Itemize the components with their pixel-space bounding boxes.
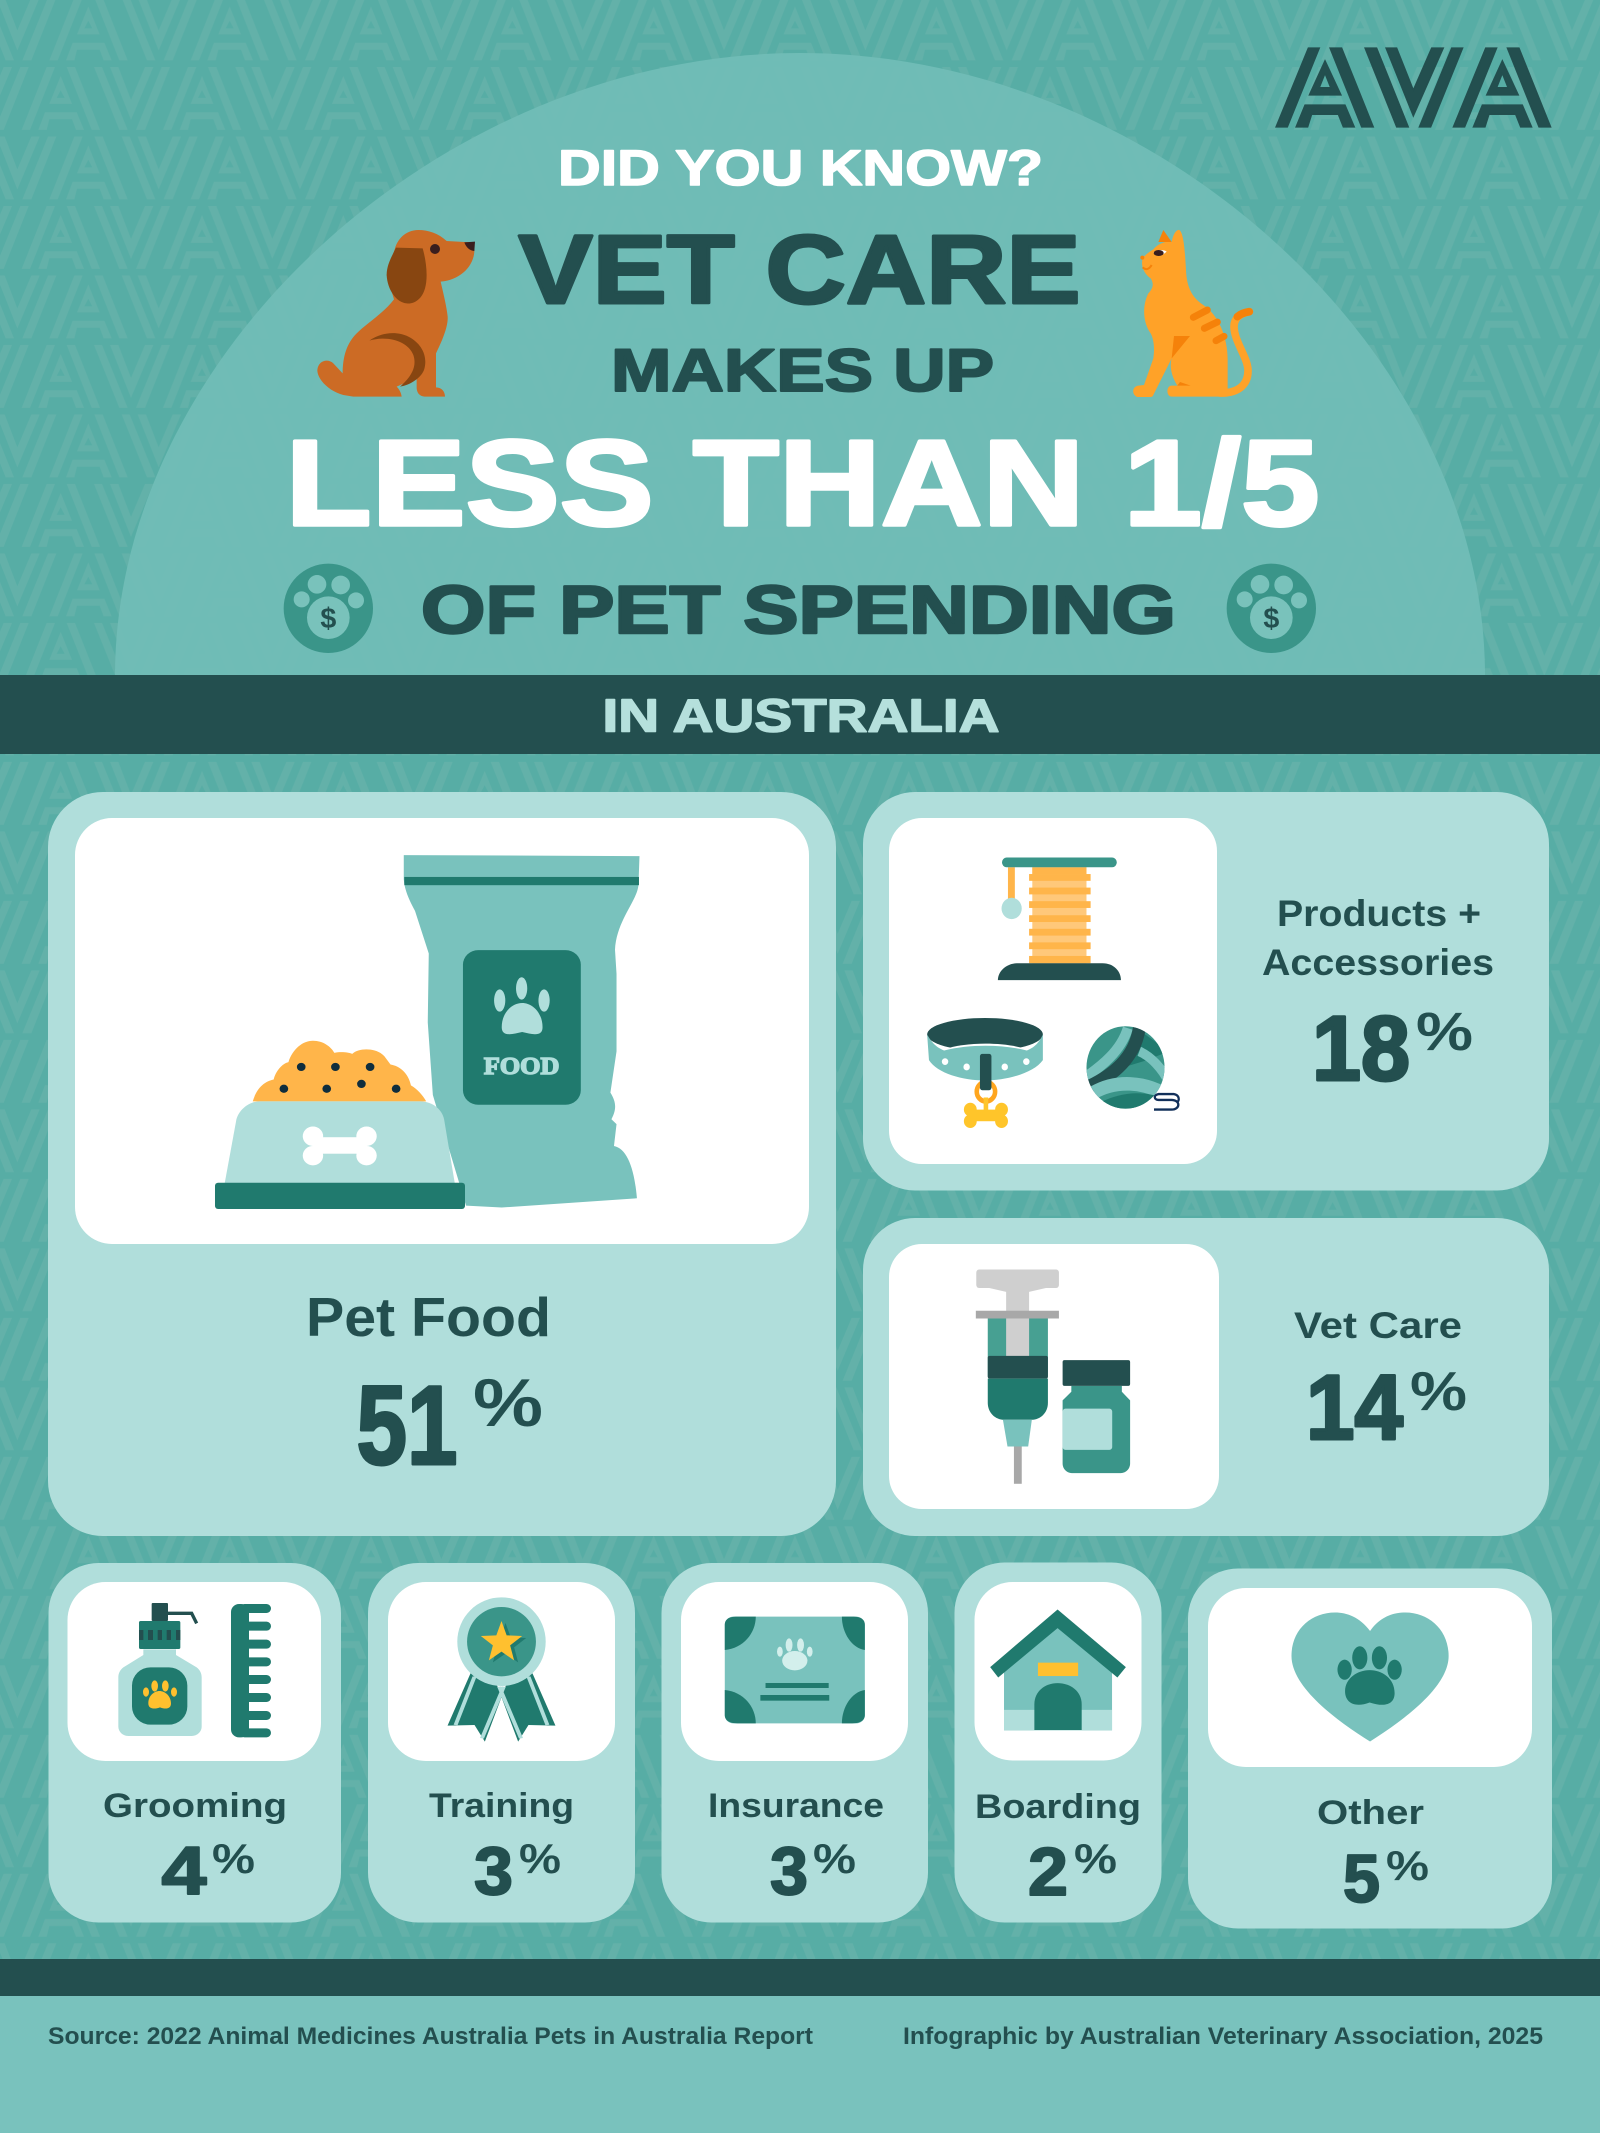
value: 5% [1343,1841,1429,1917]
label: insurance: Insurance [708,1787,884,1825]
value: 14% [1306,1357,1467,1459]
value: 3% [474,1833,561,1909]
source credit: Source: 2022 Animal Medicines Australia Pets in Australia Report [48,2023,813,2050]
heading: vet care: VET CARE [518,215,1080,324]
label: boarding: Boarding [975,1788,1141,1826]
icon: paw coin right [1227,564,1316,653]
icon: syringe and medicine bottle [976,1270,1130,1484]
value: 14%: % [1410,1360,1467,1422]
panel: boarding [954,1562,1162,1922]
panel: training [368,1563,635,1922]
heading: of pet spending: OF PET SPENDING [421,572,1176,648]
icon: kennel [990,1609,1126,1730]
icon: paw coin right: $ [1263,603,1279,635]
icon: award ribbon [448,1597,555,1742]
footer [0,1959,1600,2133]
panel: products and accessories [863,792,1549,1190]
label: products + accessories: Products + [1277,893,1481,934]
value: 4% [162,1833,255,1909]
heading: did you know: DID YOU KNOW? [558,140,1043,196]
icon: heart with paw [1291,1612,1449,1741]
value: 5%: 5 [1343,1841,1380,1917]
icon: food bag and bowl [215,855,639,1209]
value: 3%: % [519,1835,561,1882]
label: vet care: Vet Care [1294,1305,1462,1346]
value: 51%: % [473,1365,543,1441]
icon: paw coin left: $ [320,603,336,635]
panel: vet care [863,1218,1549,1536]
icon: paw coin left [284,564,373,653]
value: 51%: 51 [356,1363,458,1488]
value: 5%: % [1386,1842,1429,1889]
value: 2% [1028,1834,1117,1910]
value: 18% [1312,998,1473,1100]
label: grooming: Grooming [103,1787,287,1825]
panel: pet food [48,792,836,1536]
value: 51% [356,1363,543,1488]
logo: AVA [1276,48,1551,127]
label: other: Other [1317,1794,1424,1832]
label: products + accessories [1262,893,1494,983]
icon: food bag and bowl: FOOD [484,1054,559,1080]
value: 2%: 2 [1028,1834,1068,1910]
value: 4%: % [212,1835,255,1882]
panel: other [1188,1568,1552,1928]
value: 3%: 3 [474,1833,513,1909]
label: pet food: Pet Food [306,1286,551,1348]
label: training: Training [429,1787,574,1825]
value: 18%: 18 [1312,998,1410,1100]
icon: cat [1133,230,1249,397]
banner: in australia: IN AUSTRALIA [602,690,1000,742]
value: 3%: % [813,1835,856,1882]
icon: scratching post, collar and yarn [927,858,1179,1128]
value: 3%: 3 [770,1833,808,1909]
heading: makes up: MAKES UP [611,337,994,404]
icon: dog [317,230,475,397]
value: 2%: % [1074,1835,1117,1882]
panel: grooming [48,1563,341,1922]
label: products + accessories: Accessories [1262,942,1494,983]
value: 14%: 14 [1306,1357,1403,1459]
value: 4%: 4 [162,1833,207,1909]
value: 18%: % [1416,1002,1473,1062]
header arch [115,53,1485,676]
banner: in australia [0,675,1600,754]
value: 3% [770,1833,856,1909]
heading: less than 1/5: LESS THAN 1/5 [286,415,1320,551]
panel: insurance [662,1563,928,1922]
infographic credit: Infographic by Australian Veterinary Association, 2025 [903,2023,1543,2050]
icon: shampoo bottle and comb [118,1603,271,1737]
icon: insurance certificate [725,1617,865,1723]
